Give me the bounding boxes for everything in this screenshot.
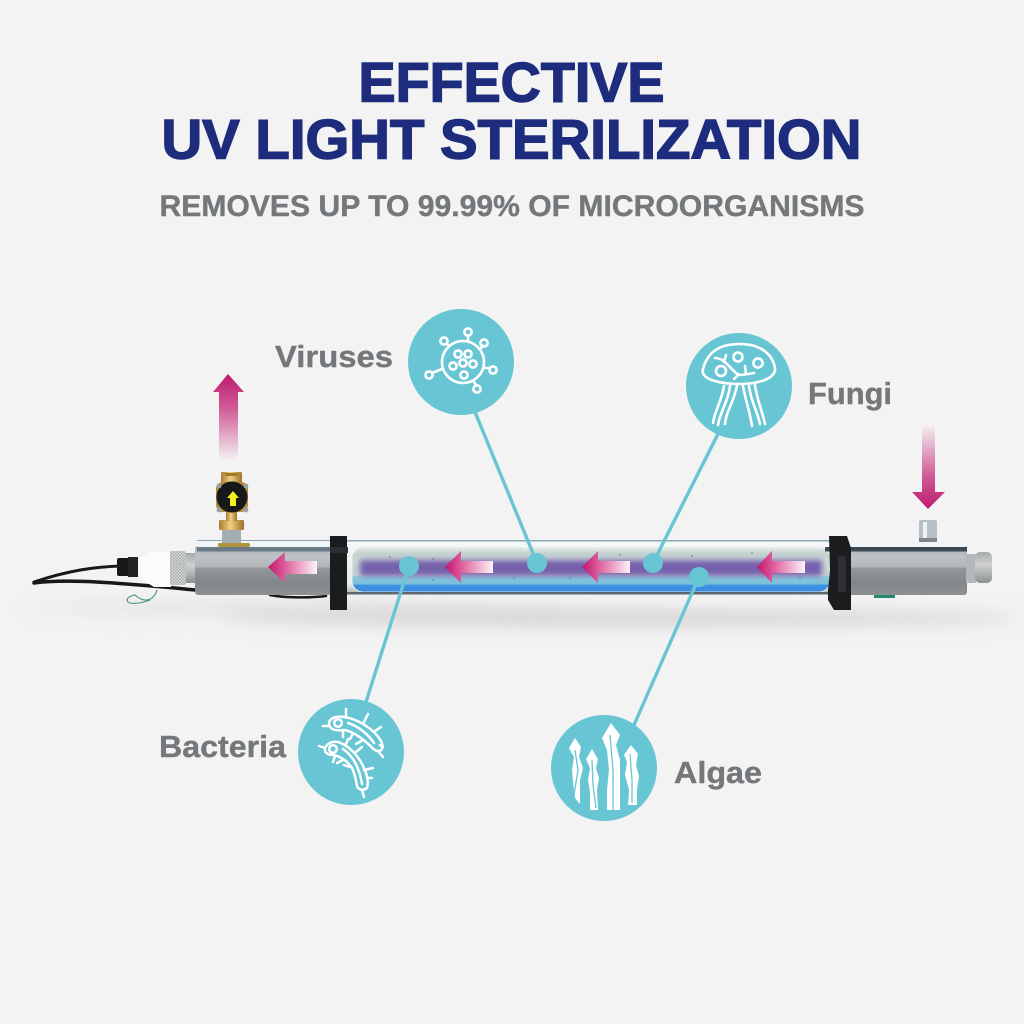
white connector [139,552,171,587]
cable gland [117,557,138,577]
title: UV LIGHT STERILIZATION [162,107,862,170]
collar [186,553,196,583]
label: algae: Algae [674,755,762,790]
title: EFFECTIVE [358,50,664,113]
arrows: flow through tube [268,551,805,583]
knurled nut [170,551,186,585]
end cap [966,552,992,583]
power cable [34,566,326,597]
label: viruses: Viruses [275,339,393,374]
icon: fungi [686,333,792,439]
ground wire [127,590,157,603]
ground shadow [30,601,1020,626]
glass tube [345,540,835,595]
left steel body [195,540,331,595]
right steel body [825,541,967,598]
right clamp [828,536,851,610]
icon: yellow arrow [227,491,239,506]
title [162,50,862,170]
label: fungi: Fungi [808,376,892,411]
UV sterilizer unit [34,472,992,610]
icon: algae [551,715,657,821]
connector lines [366,412,719,725]
label: bacteria: Bacteria [159,729,287,764]
arrow: water in [912,425,945,509]
inlet fitting [919,520,937,542]
valve fitting base [218,530,250,547]
arrow: water out [213,374,244,460]
subtitle: REMOVES UP TO 99.99% OF MICROORGANISMS [160,190,864,223]
left clamp [330,536,348,610]
icon: bacteria [298,699,404,805]
flow valve [216,472,248,530]
icon: virus [408,309,514,415]
